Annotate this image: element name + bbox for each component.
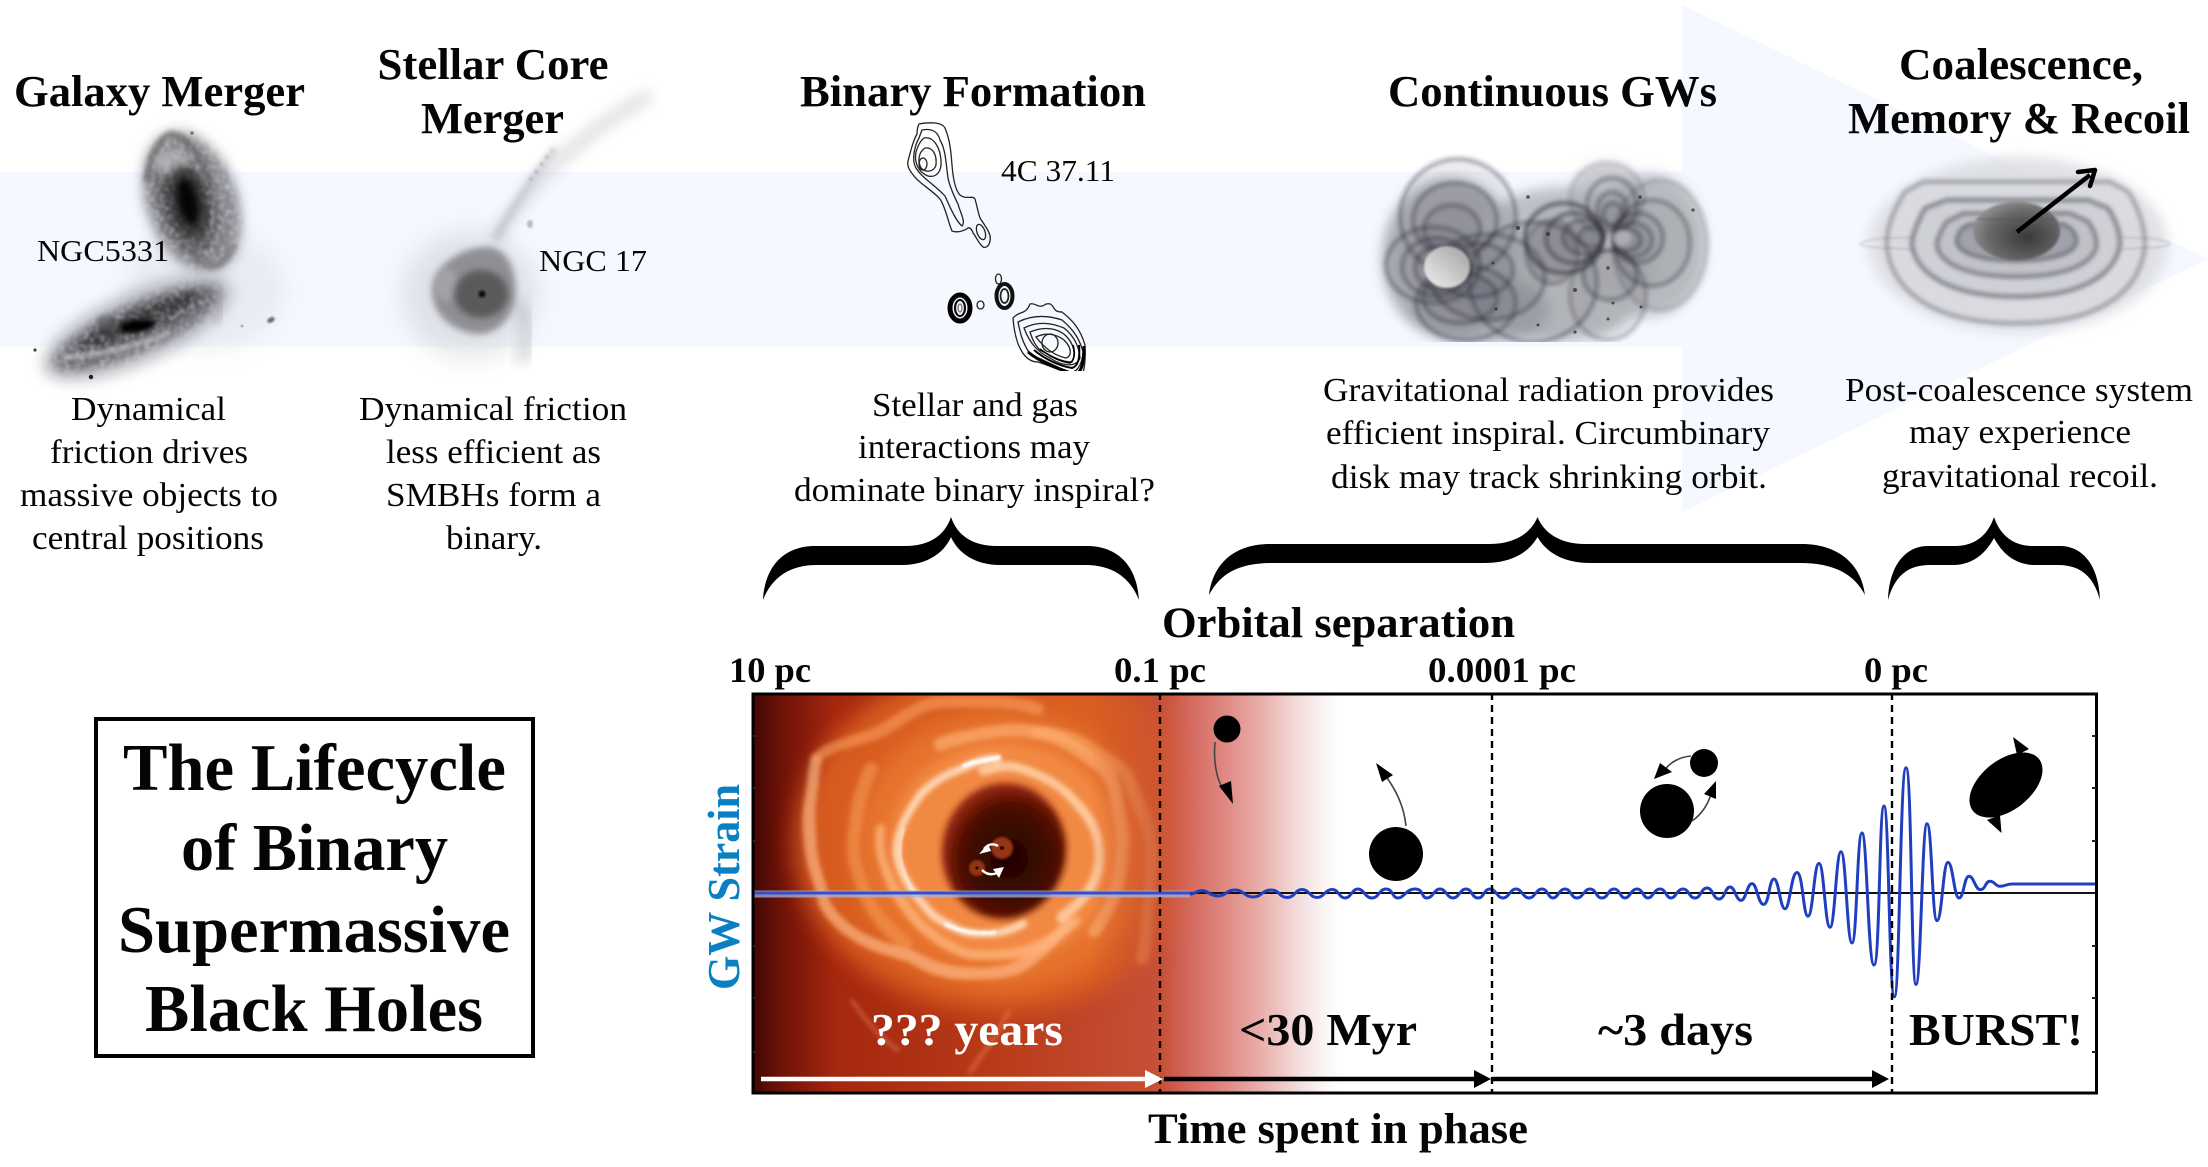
- description: galaxy merger: massive objects to: [20, 477, 278, 514]
- description: binary formation: interactions may: [858, 429, 1090, 466]
- title box: The Lifecycle: [123, 731, 506, 805]
- description: continuous GWs: Gravitational radiation provides: [1323, 372, 1774, 409]
- description: stellar core merger: [359, 391, 627, 557]
- label: NGC 17: NGC 17: [539, 243, 647, 278]
- panel: galaxy merger: [14, 67, 305, 557]
- background timeline arrow: [0, 5, 2208, 512]
- heading: continuous GWs: Continuous GWs: [1388, 67, 1717, 116]
- phase durations: [871, 1004, 2083, 1055]
- image: post-merger wavefronts and remnant: [1860, 157, 2170, 333]
- brace: binary formation: [763, 517, 1139, 600]
- description: continuous GWs: [1323, 372, 1774, 496]
- plot frame: [753, 694, 2096, 1093]
- title box: of Binary: [181, 811, 448, 885]
- description: binary formation: [794, 387, 1155, 509]
- description: galaxy merger: friction drives: [50, 434, 248, 471]
- description: coalescence: Post-coalescence system: [1845, 372, 2193, 409]
- heading: galaxy merger: Galaxy Merger: [14, 67, 305, 116]
- phase durations: ~3 days: [1598, 1004, 1753, 1055]
- description: stellar core merger: less efficient as: [386, 434, 601, 471]
- label: NGC5331: NGC5331: [37, 233, 169, 268]
- heading: coalescence, memory and recoil: Memory & Recoil: [1848, 94, 2190, 143]
- icon: merged black hole with recoil: [1958, 737, 2054, 833]
- heading: coalescence, memory and recoil: Coalescence,: [1899, 40, 2143, 89]
- brace: coalescence: [1888, 517, 2100, 600]
- description: stellar core merger: SMBHs form a: [386, 477, 601, 514]
- icon: separated black holes, small: [1214, 716, 1240, 804]
- description: binary formation: Stellar and gas: [872, 387, 1078, 424]
- panel: continuous GWs: [1323, 67, 1774, 496]
- arrow: time to coalescence: [1492, 1070, 1889, 1088]
- arrow: time in disk phase: [761, 1070, 1163, 1088]
- arrow: time to GW regime: [1164, 1070, 1491, 1088]
- icon: separated black holes, large: [1369, 763, 1423, 881]
- description: continuous GWs: disk may track shrinking orbit.: [1331, 459, 1767, 496]
- panel: binary formation: [794, 67, 1155, 509]
- panel: coalescence, memory and recoil: [1845, 40, 2193, 495]
- axis labels: separation values: 0.0001 pc: [1428, 650, 1576, 690]
- description: galaxy merger: Dynamical: [71, 391, 226, 428]
- image: interacting galaxies NGC5331: [27, 115, 285, 405]
- image: galaxy NGC 17 with tidal tail: [402, 95, 650, 362]
- image: circumbinary disk simulation: [754, 696, 1326, 1092]
- phase durations: BURST!: [1909, 1004, 2083, 1055]
- title box: Black Holes: [145, 972, 483, 1046]
- description: galaxy merger: central positions: [32, 520, 264, 557]
- image: gravitational wave ripples from inspiral: [1382, 159, 1707, 346]
- heading: stellar core merger: Stellar Core: [378, 40, 608, 89]
- axis title: orbital separation: Orbital separation: [1162, 600, 1515, 647]
- waveform: gravitational wave strain: [752, 768, 2096, 997]
- heading: binary formation: Binary Formation: [800, 67, 1146, 116]
- phase boundaries: [1160, 693, 1892, 1093]
- description: coalescence: may experience: [1909, 414, 2131, 451]
- label: 4C 37.11: 4C 37.11: [1001, 153, 1115, 188]
- title box: Supermassive: [118, 893, 510, 967]
- description: continuous GWs: efficient inspiral. Circumbinary: [1326, 415, 1770, 452]
- axis labels: separation values: 0 pc: [1864, 650, 1928, 690]
- phase durations: <30 Myr: [1239, 1004, 1417, 1055]
- axis labels: separation values: 0.1 pc: [1114, 650, 1206, 690]
- description: coalescence: gravitational recoil.: [1882, 458, 2158, 495]
- description: stellar core merger: binary.: [446, 520, 542, 557]
- description: coalescence: [1845, 372, 2193, 495]
- description: stellar core merger: Dynamical friction: [359, 391, 627, 428]
- heading: coalescence, memory and recoil: [1848, 40, 2190, 143]
- axis labels: separation values: 10 pc: [729, 650, 811, 690]
- heading: stellar core merger: Merger: [421, 94, 564, 143]
- axis title: time spent in phase: Time spent in phase: [1148, 1106, 1528, 1153]
- image: radio contours of 4C 37.11: [908, 123, 1085, 380]
- panel: stellar core merger: [359, 40, 650, 557]
- description: galaxy merger: [20, 391, 278, 557]
- brace: continuous GWs: [1209, 517, 1865, 595]
- title box: [96, 719, 533, 1056]
- chart: gravitational wave strain timeline: [752, 692, 2098, 1094]
- axis labels: separation values: [729, 650, 1928, 690]
- description: binary formation: dominate binary inspiral?: [794, 472, 1155, 509]
- baseline: [752, 892, 2096, 894]
- axis title: GW strain: GW Strain: [699, 784, 749, 990]
- heading: stellar core merger: [378, 40, 608, 143]
- phase durations: ??? years: [871, 1004, 1063, 1055]
- icon: orbiting black hole pair: [1640, 749, 1718, 838]
- arrow: gravitational recoil: [2017, 170, 2095, 232]
